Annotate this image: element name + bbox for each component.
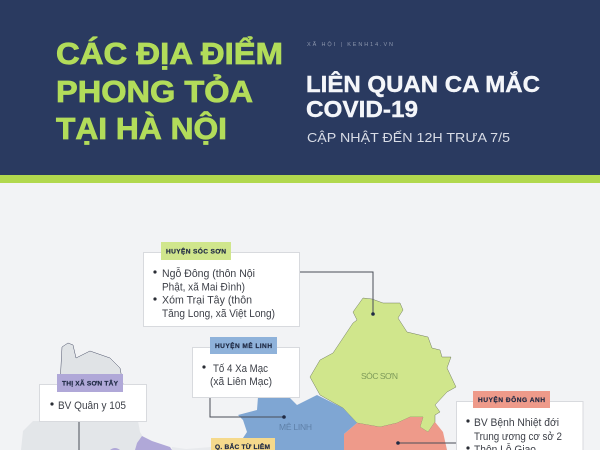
panel: Huyện Đông Anh: HUYỆN ĐÔNG ANH	[478, 395, 545, 404]
panel: Huyện Sóc Sơn: Phật, xã Mai Đình)	[162, 282, 245, 294]
district: southwest area	[21, 421, 143, 450]
title	[56, 36, 283, 146]
panel: Huyện Đông Anh	[456, 391, 583, 450]
panel: Huyện Mê Linh	[192, 337, 300, 398]
panel: Huyện Sóc Sơn: Tăng Long, xã Việt Long)	[162, 308, 275, 320]
subtitle: COVID-19	[306, 96, 418, 122]
panel: Huyện Sóc Sơn	[144, 242, 300, 326]
panel: Thị xã Sơn Tây: THỊ XÃ SƠN TÂY	[62, 378, 119, 388]
panel: Huyện Mê Linh: Tố 4 Xa Mạc	[213, 363, 268, 375]
panel: Huyện Đông Anh: BV Bệnh Nhiệt đới	[474, 417, 559, 429]
connector: Mê Linh	[210, 397, 286, 419]
update date: CẬP NHẬT ĐẾN 12H TRƯA 7/5	[307, 130, 510, 145]
panel: Quận Bắc Từ Liêm	[211, 438, 275, 450]
map of Hanoi	[21, 298, 456, 450]
source line: XÃ HỘI | KENH14.VN	[307, 41, 393, 48]
title: TẠI HÀ NỘI	[56, 110, 227, 146]
header banner	[0, 0, 600, 183]
panel: Huyện Sóc Sơn: Ngỗ Đông (thôn Nội	[162, 267, 255, 280]
label: Sóc Sơn: SÓC SƠN	[361, 371, 398, 381]
panel: Huyện Đông Anh: Trung ương cơ sở 2	[474, 431, 562, 443]
subtitle	[306, 70, 540, 122]
label: Mê Linh: MÊ LINH	[279, 422, 312, 432]
connector: Sóc Sơn	[299, 272, 375, 316]
district: Mê Linh	[238, 395, 357, 450]
connector: Sơn Tây	[78, 421, 80, 450]
panel: Thị xã Sơn Tây: BV Quân y 105	[58, 400, 126, 412]
panel: Huyện Mê Linh: (xã Liên Mạc)	[210, 376, 272, 388]
district: lower centre area	[172, 447, 243, 450]
panel: Huyện Sóc Sơn: Xóm Trại Tây (thôn	[162, 294, 252, 306]
district: Sơn Tây area	[60, 343, 123, 384]
district: Sóc Sơn	[310, 298, 456, 432]
district: Đông Anh	[344, 417, 447, 450]
title: CÁC ĐỊA ĐIỂM	[56, 36, 283, 71]
title: PHONG TỎA	[56, 73, 253, 109]
panel: Huyện Sóc Sơn: HUYỆN SÓC SƠN	[166, 246, 226, 256]
district: purple area	[110, 436, 172, 450]
connector: Đông Anh	[396, 441, 456, 445]
subtitle: LIÊN QUAN CA MẮC	[306, 70, 540, 97]
panel: Thị xã Sơn Tây	[40, 374, 146, 422]
panel: Huyện Mê Linh: HUYỆN MÊ LINH	[215, 341, 272, 350]
